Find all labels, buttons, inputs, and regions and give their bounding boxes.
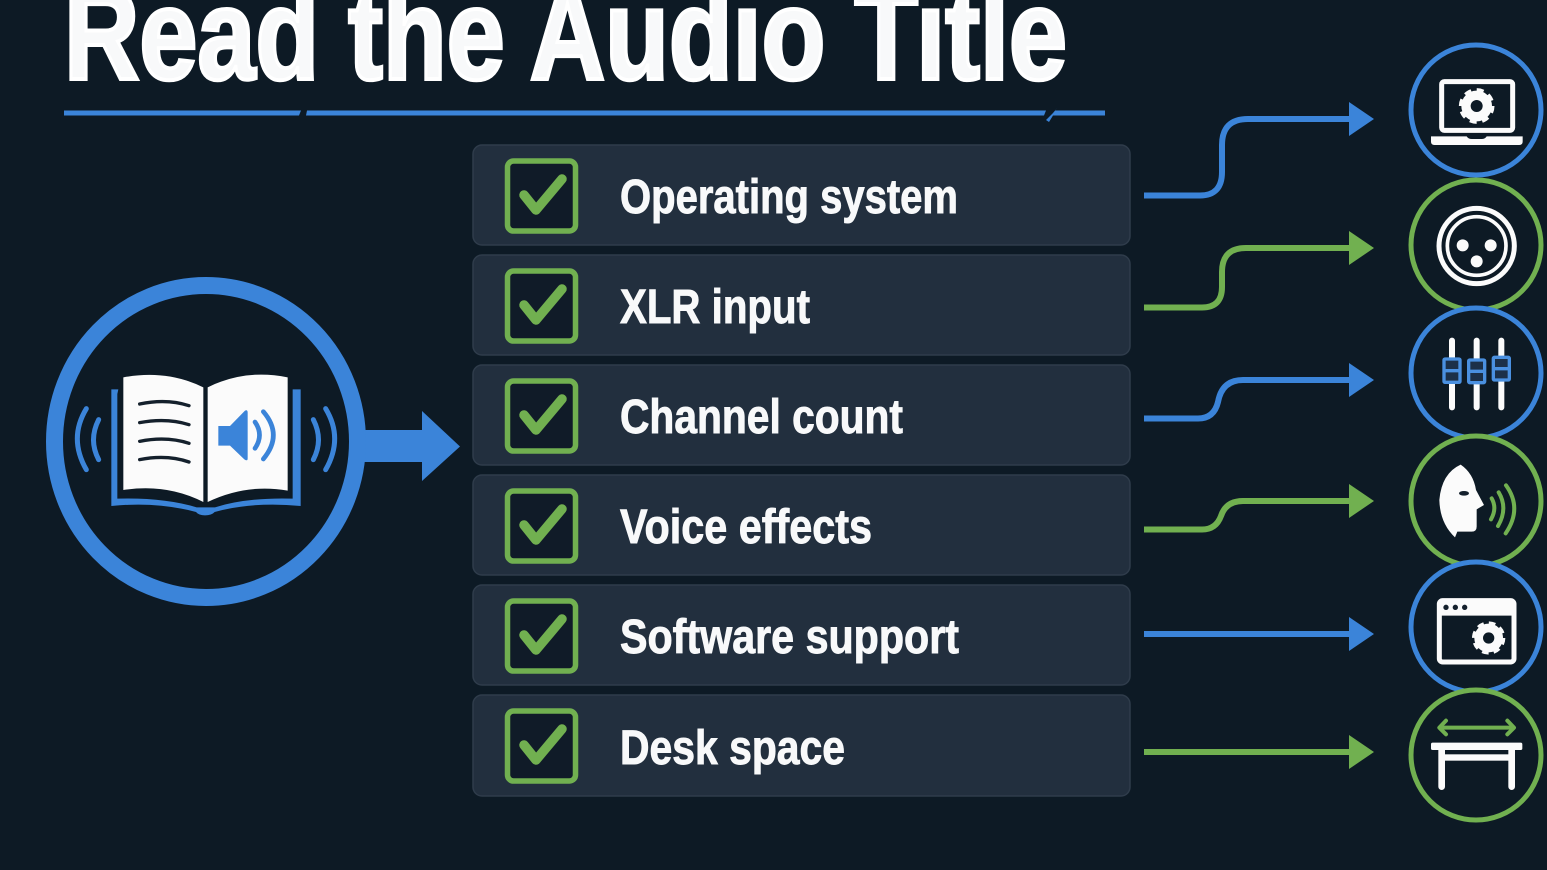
arrow: operating system connector	[1144, 102, 1374, 196]
arrow: desk space connector	[1144, 735, 1374, 769]
row: Operating system	[473, 145, 1130, 245]
row: Software support	[473, 585, 1130, 685]
row: XLR input: XLR input	[620, 281, 810, 334]
title underline	[64, 107, 1105, 122]
arrow: software support connector	[1144, 617, 1374, 651]
arrow: from audiobook to checklist	[360, 411, 460, 481]
row: XLR input	[473, 255, 1130, 355]
icon: desk with width arrow	[1411, 690, 1541, 820]
icon: XLR socket	[1411, 180, 1541, 310]
icon: laptop with gear	[1411, 45, 1541, 175]
row: Channel count: Channel count	[620, 391, 903, 444]
row: Desk space	[473, 695, 1130, 796]
row: Desk space: Desk space	[620, 722, 845, 775]
row: Operating system: Operating system	[620, 171, 958, 224]
row: Channel count	[473, 365, 1130, 465]
circle ring	[54, 286, 358, 598]
row: Software support: Software support	[620, 611, 959, 664]
icon: audiobook in circle with arrow	[54, 286, 460, 598]
arrow: XLR connector	[1144, 231, 1374, 308]
panel: checklist	[473, 145, 1130, 796]
icon: speaking face	[1411, 436, 1541, 566]
arrow: voice effects connector	[1144, 484, 1374, 530]
arrow: channel count connector	[1144, 363, 1374, 418]
row: Voice effects: Voice effects	[620, 501, 872, 554]
icon: open book with speaker	[77, 375, 335, 515]
icon: mixer sliders	[1411, 308, 1541, 438]
icon: software window with gear	[1411, 562, 1541, 692]
row: Voice effects	[473, 475, 1130, 575]
